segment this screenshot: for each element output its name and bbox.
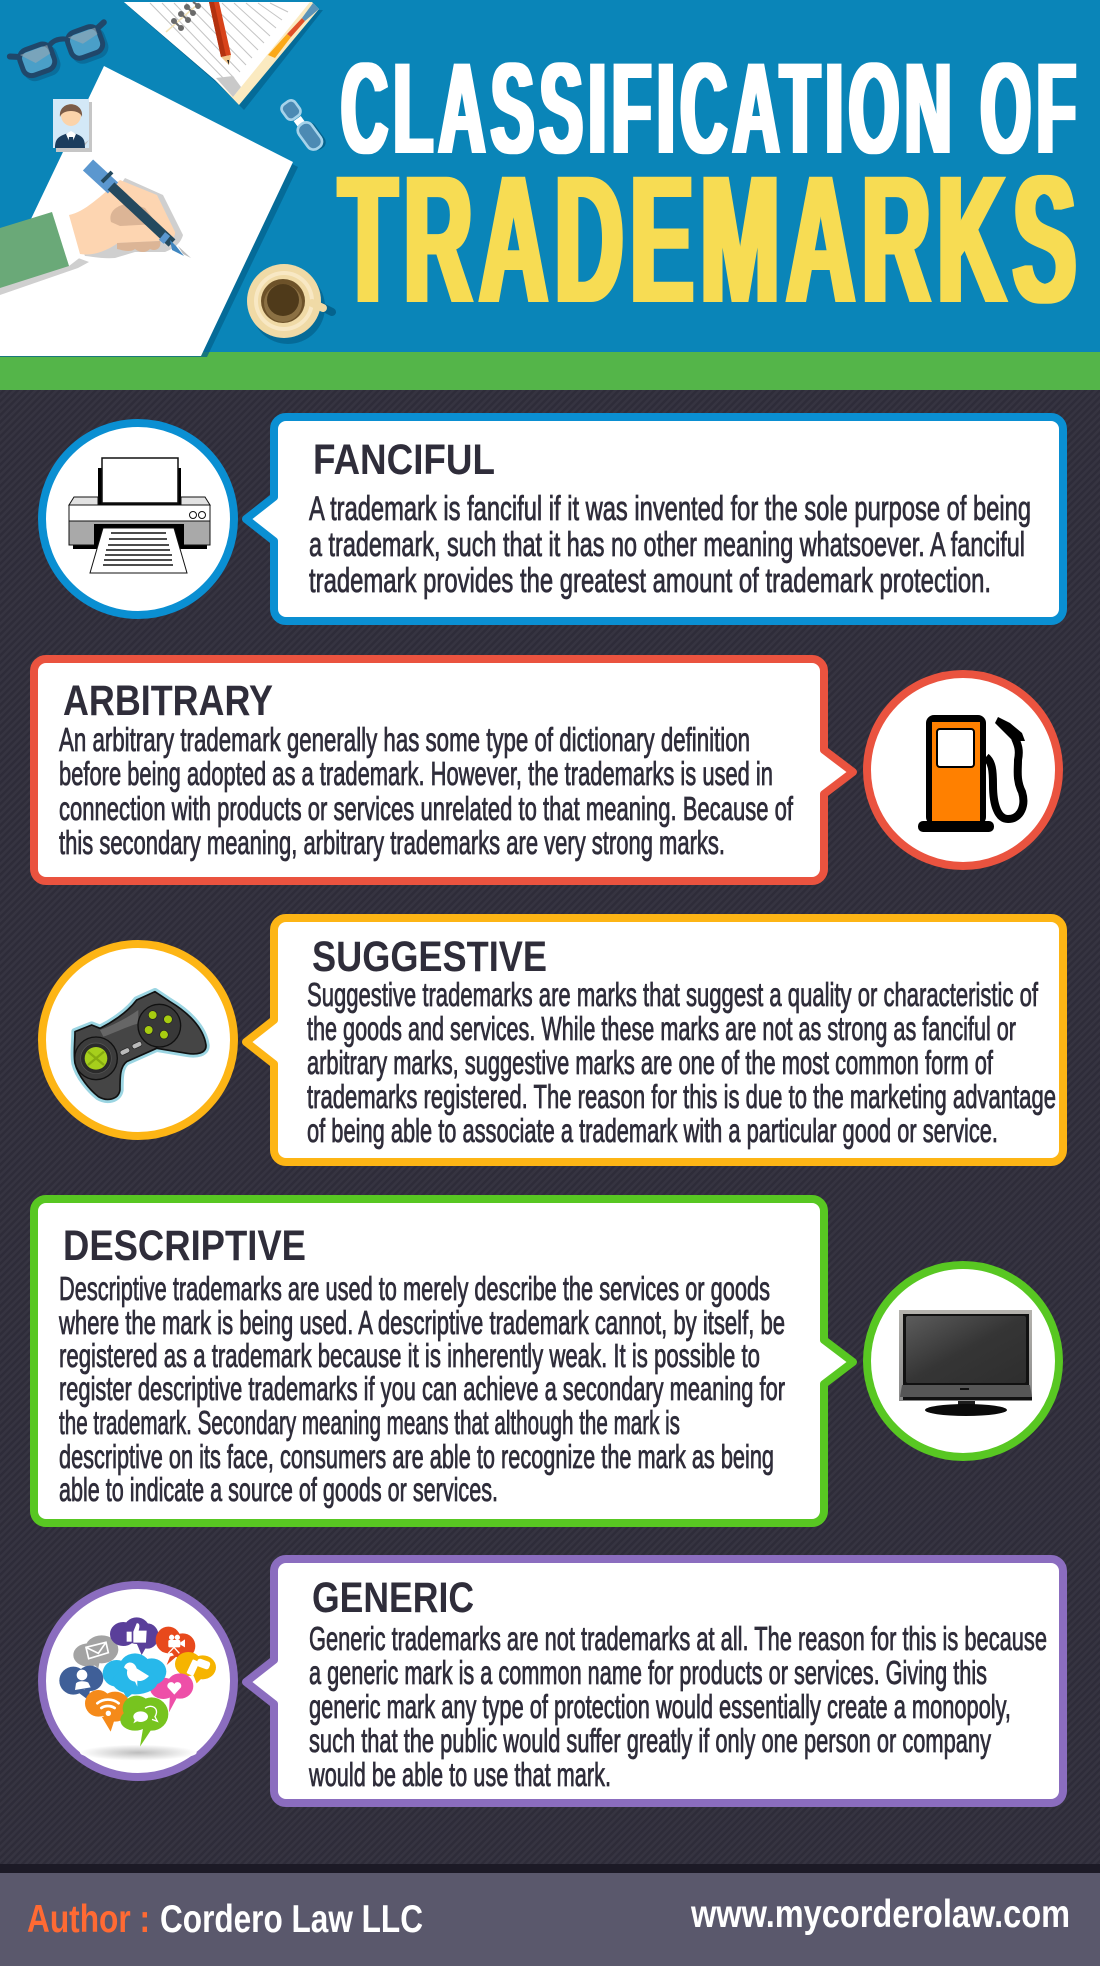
panel: generic — [42, 1559, 1063, 1803]
heading: SUGGESTIVE — [312, 933, 547, 981]
callout box — [246, 918, 1063, 1162]
body text — [308, 1620, 1047, 1793]
body text: An arbitrary trademark generally has some type of dictionary definition — [59, 721, 750, 758]
body text: able to indicate a source of goods or services. — [59, 1471, 498, 1508]
author credit: Author : — [27, 1898, 150, 1941]
body text — [58, 1270, 785, 1508]
icon: social media speech bubbles — [42, 1585, 234, 1777]
icon: game controller — [42, 944, 234, 1136]
body text — [309, 490, 1031, 600]
body text — [307, 976, 1056, 1149]
USB drive — [279, 97, 329, 155]
green band — [0, 352, 1100, 390]
panel: arbitrary — [34, 659, 1059, 881]
photo ID — [53, 99, 92, 152]
heading: DESCRIPTIVE — [63, 1222, 306, 1270]
icon: fuel pump — [867, 674, 1059, 866]
icon: printer — [42, 423, 234, 615]
footer — [0, 1864, 1100, 1966]
glasses — [10, 21, 114, 85]
heading: GENERIC — [312, 1574, 474, 1622]
body text: would be able to use that mark. — [308, 1756, 611, 1793]
body text: the trademark. Secondary meaning means that although the mark is — [59, 1404, 680, 1441]
notebook — [124, 2, 323, 110]
callout box — [246, 1559, 1063, 1803]
callout box — [34, 659, 853, 881]
writing hand with pen — [0, 165, 191, 295]
coffee cup — [247, 264, 332, 344]
title: TRADEMARKS — [339, 138, 1083, 341]
panel: fanciful — [42, 417, 1063, 621]
body text: registered as a trademark because it is inherently weak. It is possible to — [59, 1337, 760, 1374]
icon: television — [867, 1265, 1059, 1457]
author credit: Cordero Law LLC — [160, 1898, 423, 1941]
illustration: desk with paper, hand, glasses, notebook, coffee — [0, 2, 332, 357]
panel: suggestive — [42, 918, 1063, 1162]
author credit — [27, 1898, 423, 1941]
title: CLASSIFICATION OF — [341, 35, 1082, 181]
callout box — [34, 1199, 853, 1523]
header banner — [0, 0, 1100, 390]
heading: ARBITRARY — [63, 677, 273, 725]
heading: FANCIFUL — [313, 436, 495, 484]
body text: this secondary meaning, arbitrary trademarks are very strong marks. — [59, 824, 725, 861]
body text — [59, 721, 794, 861]
panel: descriptive — [34, 1199, 1059, 1523]
title — [339, 35, 1083, 341]
callout box — [246, 417, 1063, 621]
